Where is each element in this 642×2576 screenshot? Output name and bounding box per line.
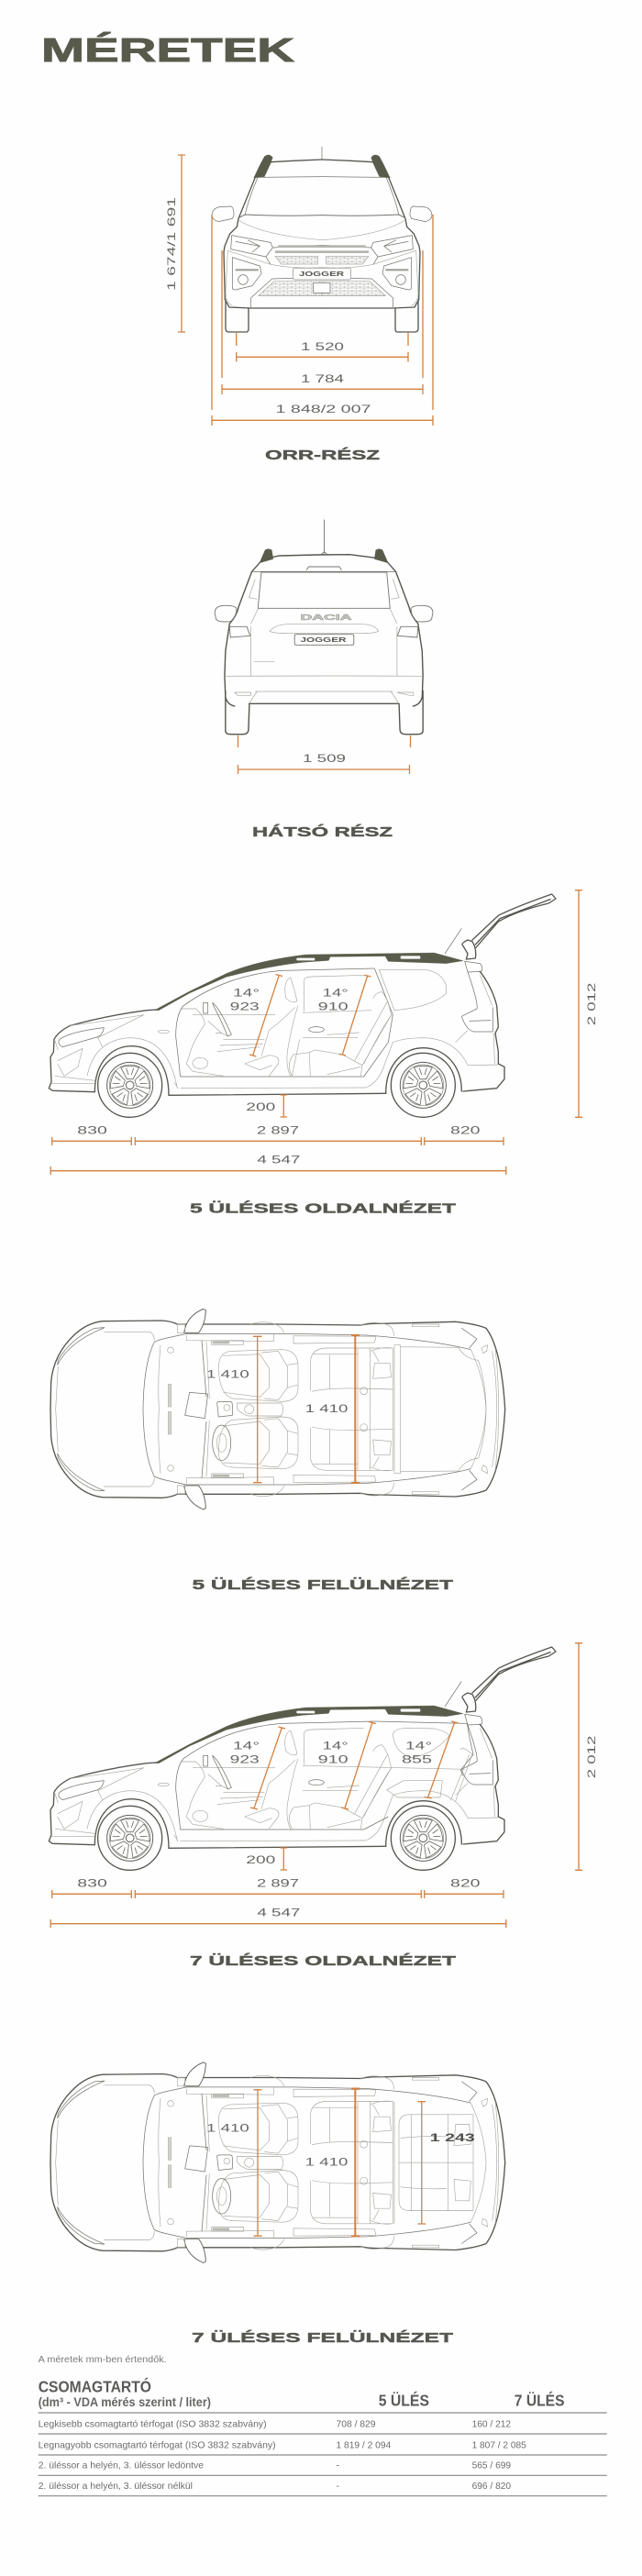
labels: seats bbox=[230, 1740, 433, 1766]
seat width lines bbox=[253, 2090, 426, 2236]
heading: front: ORR-RÉSZ bbox=[265, 448, 380, 463]
second-row width line bbox=[351, 2089, 360, 2236]
dimension: ground clearance bbox=[281, 1848, 287, 1870]
label: 4 547: 4 547 bbox=[257, 1906, 301, 1918]
column head: 5 seats: 5 ÜLÉS bbox=[379, 2390, 429, 2409]
dimension: ground clearance bbox=[281, 1095, 287, 1117]
label: 910: 910 bbox=[318, 1753, 349, 1766]
panel: front view bbox=[165, 147, 433, 426]
dimension: length bbox=[50, 1919, 506, 1928]
row 4 bbox=[39, 2481, 511, 2492]
labels: wheelbase row bbox=[77, 1124, 481, 1137]
row 3: 565 / 699 bbox=[472, 2460, 511, 2471]
row 3: - bbox=[336, 2460, 339, 2471]
row 3: 2. üléssor a helyén, 3. üléssor ledöntve bbox=[39, 2460, 204, 2471]
label: 2 012: 2 012 bbox=[585, 982, 598, 1025]
label: 855: 855 bbox=[402, 1753, 433, 1766]
label: height: 1 674/1 691 bbox=[165, 196, 178, 291]
label: 2 897: 2 897 bbox=[257, 1877, 299, 1890]
brand text: DACIA bbox=[301, 613, 352, 622]
label: 820: 820 bbox=[450, 1877, 481, 1890]
dimension: open height bbox=[575, 890, 582, 1117]
label: 4 547: 4 547 bbox=[257, 1153, 301, 1166]
label: 1 410 middle: 1 410 bbox=[305, 2155, 349, 2168]
row 4: 2. üléssor a helyén, 3. üléssor nélkül bbox=[39, 2481, 193, 2492]
panel: 7-seat top view bbox=[50, 2062, 505, 2262]
label: 1 848/2 007: 1 848/2 007 bbox=[275, 403, 371, 415]
column head: 7 seats: 7 ÜLÉS bbox=[515, 2390, 565, 2409]
row 4: - bbox=[336, 2481, 339, 2492]
car side view bbox=[49, 1647, 556, 1870]
label: angle rear: 14° bbox=[405, 1740, 432, 1752]
seat measure lines bbox=[249, 974, 371, 1056]
seat measure lines bbox=[250, 1721, 459, 1809]
row 1 bbox=[39, 2419, 511, 2430]
label: angle front: 14° bbox=[233, 1740, 260, 1752]
car front view bbox=[212, 147, 432, 332]
dimension: wheelbase row bbox=[52, 1137, 504, 1145]
seat width lines bbox=[253, 1336, 262, 1483]
table subheading: (dm³ - VDA mérés szerint / liter) bbox=[39, 2395, 211, 2409]
labels: seats bbox=[230, 987, 349, 1013]
label: 1 243: 1 243 bbox=[430, 2131, 475, 2144]
label: 1 520: 1 520 bbox=[301, 340, 345, 353]
heading: 5-seat top: 5 ÜLÉSES FELÜLNÉZET bbox=[193, 1577, 453, 1593]
dimension: height bbox=[178, 155, 185, 332]
row 2 bbox=[39, 2439, 526, 2450]
label: 2 897: 2 897 bbox=[257, 1124, 299, 1137]
label: angle front: 14° bbox=[233, 987, 260, 1000]
label: 200: 200 bbox=[246, 1853, 276, 1866]
dimension: length bbox=[50, 1166, 506, 1175]
row 2: Legnagyobb csomagtartó térfogat (ISO 3832 szabvány) bbox=[39, 2439, 276, 2450]
row 2: 1 819 / 2 094 bbox=[336, 2439, 391, 2450]
row 2: 1 807 / 2 085 bbox=[472, 2439, 526, 2450]
label: 1 410 rear: 1 410 bbox=[305, 1402, 349, 1415]
label: angle middle: 14° bbox=[323, 1740, 349, 1752]
row 3 bbox=[39, 2460, 511, 2471]
label: 1 784: 1 784 bbox=[301, 372, 345, 385]
car rear view bbox=[215, 520, 433, 735]
row 1: Legkisebb csomagtartó térfogat (ISO 3832 szabvány) bbox=[39, 2419, 267, 2430]
note: A méretek mm-ben értendők. bbox=[39, 2355, 167, 2365]
dimension: open height bbox=[575, 1643, 582, 1870]
label: angle rear: 14° bbox=[323, 987, 349, 1000]
panel: rear view bbox=[215, 520, 433, 774]
car top view bbox=[50, 2062, 505, 2262]
label: 2 012: 2 012 bbox=[585, 1735, 598, 1778]
dimension: wheelbase row bbox=[52, 1890, 504, 1898]
title: MÉRETEK bbox=[41, 31, 294, 69]
row 4: 696 / 820 bbox=[472, 2481, 511, 2492]
heading: rear: HÁTSÓ RÉSZ bbox=[252, 824, 393, 840]
label: 830: 830 bbox=[77, 1877, 107, 1890]
label: 830: 830 bbox=[77, 1124, 107, 1137]
plate text: JOGGER bbox=[301, 636, 347, 644]
row 1: 160 / 212 bbox=[472, 2419, 511, 2430]
labels: wheelbase row bbox=[77, 1877, 481, 1890]
label: 923: 923 bbox=[230, 1753, 260, 1766]
label: 820: 820 bbox=[450, 1124, 481, 1137]
label: 910: 910 bbox=[318, 1001, 349, 1013]
dimension: front track bbox=[237, 332, 408, 361]
label: 1 410 front: 1 410 bbox=[206, 2121, 249, 2134]
heading: 7-seat side: 7 ÜLÉSES OLDALNÉZET bbox=[190, 1953, 456, 1969]
second-row width line bbox=[351, 1335, 360, 1483]
car top view bbox=[50, 1309, 505, 1509]
label: 923: 923 bbox=[230, 1001, 260, 1013]
heading: 7-seat top: 7 ÜLÉSES FELÜLNÉZET bbox=[192, 2330, 453, 2346]
dimension: body width bbox=[222, 250, 423, 394]
panel: 5-seat side view bbox=[49, 890, 598, 1175]
label: 1 410 front: 1 410 bbox=[206, 1368, 249, 1381]
row 1: 708 / 829 bbox=[336, 2419, 376, 2430]
panel: 7-seat side view bbox=[49, 1643, 598, 1928]
dimension: rear track bbox=[238, 735, 411, 774]
heading: 5-seat side: 5 ÜLÉSES OLDALNÉZET bbox=[190, 1201, 456, 1217]
panel: 5-seat top view bbox=[50, 1309, 505, 1509]
dimension: mirror width bbox=[212, 215, 433, 426]
car side view bbox=[49, 894, 556, 1117]
table: luggage capacity bbox=[39, 2376, 607, 2496]
plate text: JOGGER bbox=[299, 270, 345, 278]
table heading: CSOMAGTARTÓ bbox=[39, 2376, 151, 2395]
label: 200: 200 bbox=[246, 1100, 276, 1113]
label: 1 509: 1 509 bbox=[303, 752, 347, 765]
